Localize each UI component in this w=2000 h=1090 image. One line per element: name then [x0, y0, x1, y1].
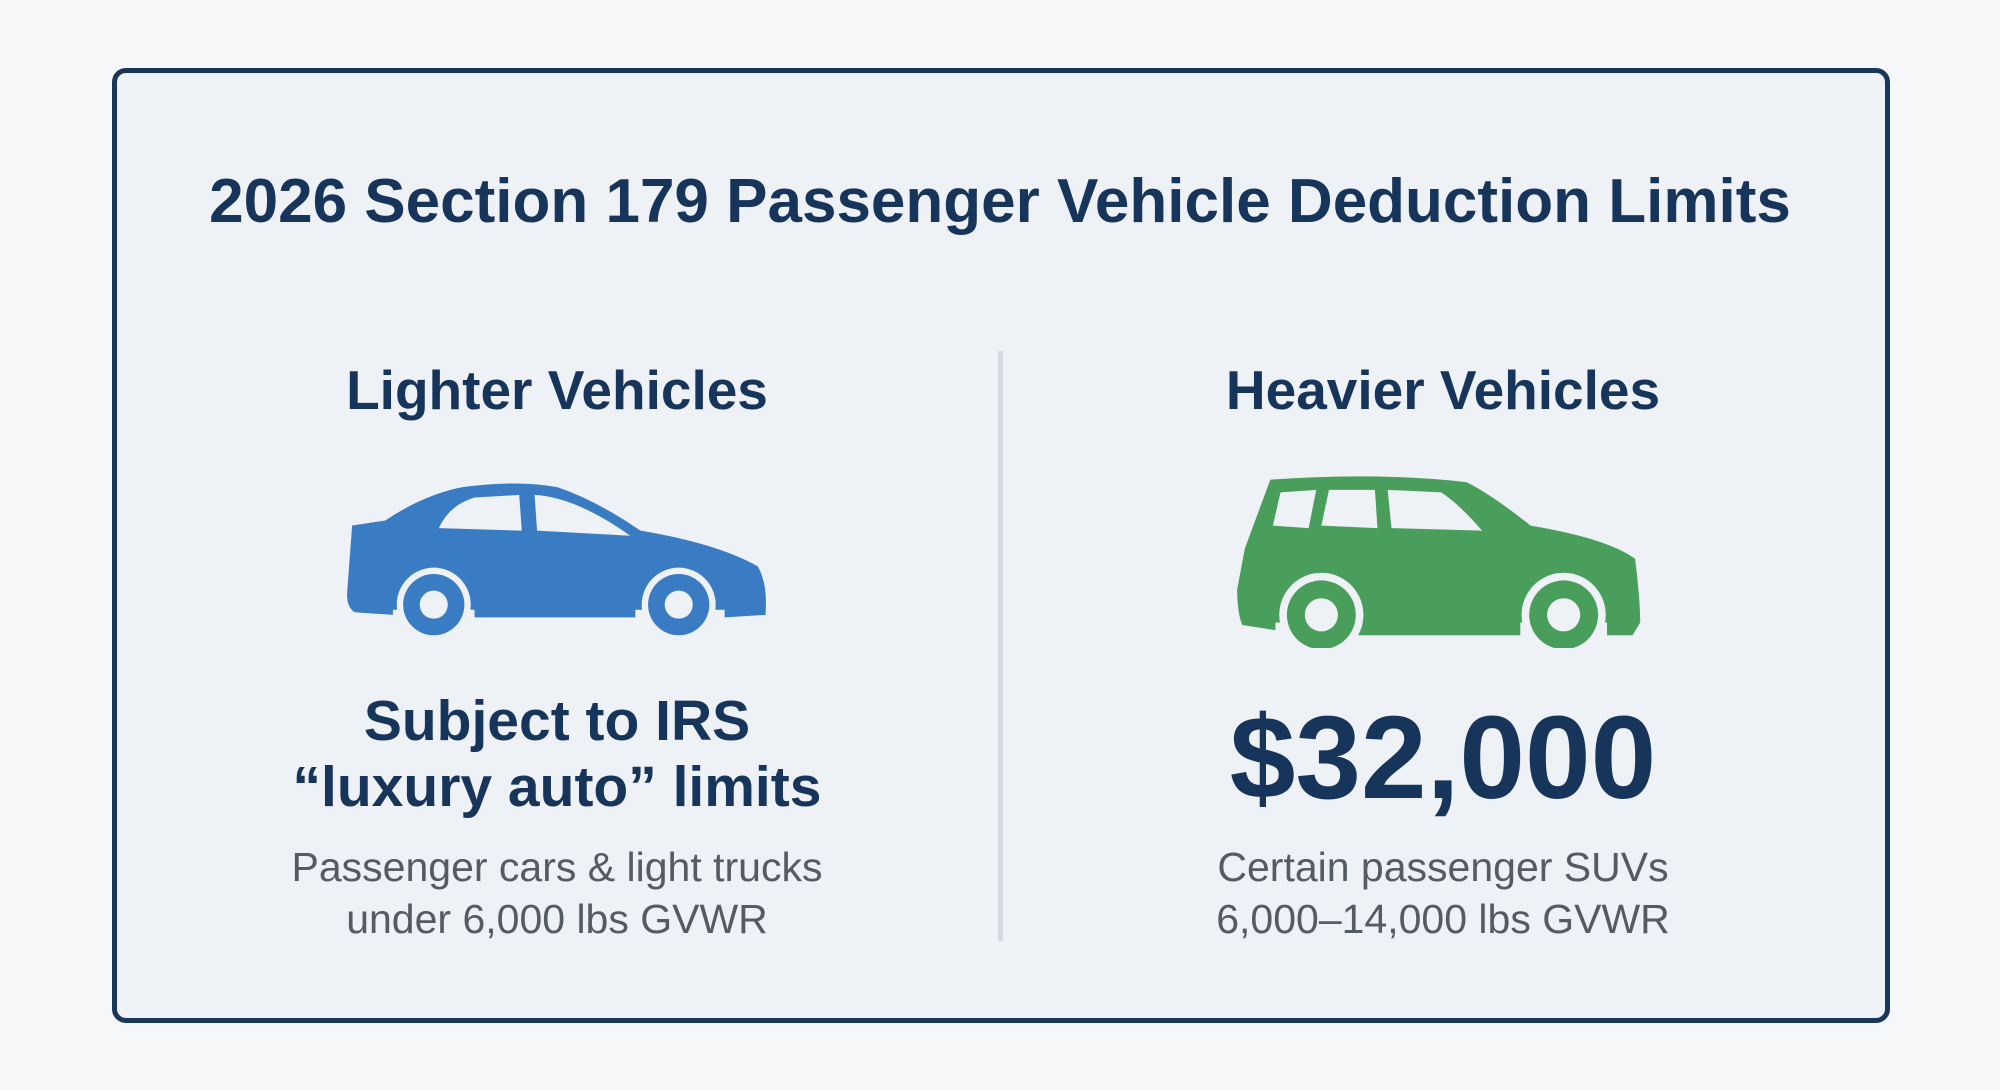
- heading: heavier vehicles: Heavier Vehicles: [1226, 359, 1660, 421]
- title: 2026 Section 179 Passenger Vehicle Deduction Limits: [209, 167, 1791, 236]
- icon: blue car: [347, 484, 766, 636]
- text: luxury auto limits: Subject to IRS: [364, 689, 750, 753]
- text: lighter description: under 6,000 lbs GVWR: [346, 896, 768, 942]
- text: lighter description: [292, 844, 822, 942]
- text: heavier description: 6,000–14,000 lbs GVWR: [1216, 896, 1670, 942]
- icon: green SUV: [1237, 476, 1640, 648]
- text: heavier description: [1216, 844, 1670, 942]
- text: lighter description: Passenger cars & light trucks: [292, 844, 822, 890]
- text: luxury auto limits: “luxury auto” limits: [293, 755, 821, 819]
- text: heavier description: Certain passenger SUVs: [1217, 844, 1669, 890]
- text: $32,000: $32,000: [1230, 692, 1656, 824]
- heading: lighter vehicles: Lighter Vehicles: [346, 359, 768, 421]
- panel: frame: [112, 68, 1890, 1023]
- text: luxury auto limits: [293, 689, 821, 819]
